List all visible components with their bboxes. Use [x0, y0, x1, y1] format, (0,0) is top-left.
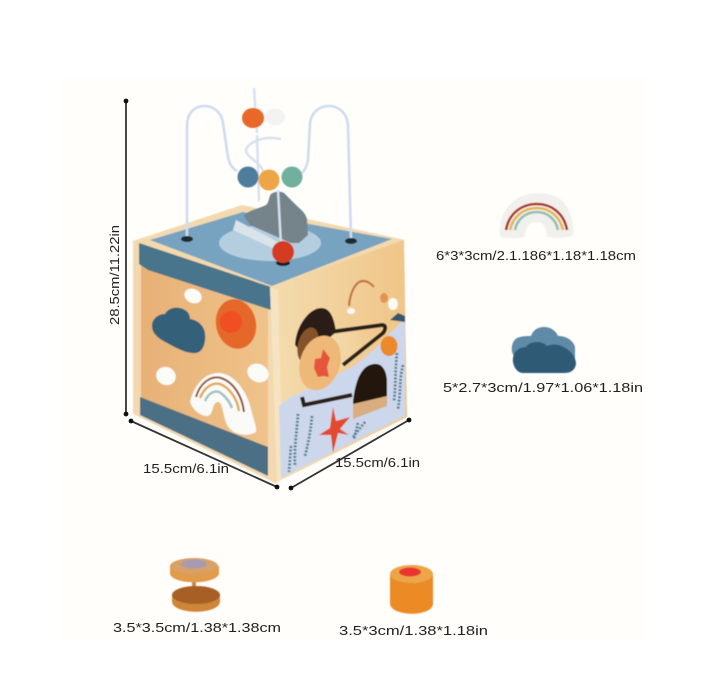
icon: cloud piece [512, 327, 576, 373]
label: right width: 15.5cm/6.1in [335, 455, 420, 470]
wire posts [181, 236, 193, 242]
lower arched hole [353, 364, 387, 418]
wooden bead with crab [292, 325, 348, 396]
bead wire frame [187, 106, 351, 238]
birds [380, 293, 398, 310]
cube wooden top frame [133, 205, 405, 290]
spiral wire [246, 88, 281, 245]
dimension arrow: left width [129, 419, 279, 489]
black groove [302, 325, 385, 405]
cloud cutout [152, 308, 205, 353]
sun shape block [211, 295, 261, 353]
dimension arrow: right width [289, 418, 411, 490]
whale block [244, 192, 308, 243]
icon: sun cylinder piece [390, 565, 433, 614]
sea illustration [279, 318, 405, 478]
icon: rainbow piece [500, 193, 573, 238]
background panel [60, 78, 647, 640]
label: height: 28.5cm/11.22in [107, 225, 122, 325]
red knob [276, 260, 290, 266]
small clouds [153, 286, 272, 388]
starfish [319, 407, 350, 453]
dimension arrow: height [124, 99, 128, 416]
dial disc [219, 225, 321, 261]
label: rainbow size: 6*3*3cm/2.1.186*1.18*1.18cm [436, 248, 636, 263]
label: sun cylinder size: 3.5*3cm/1.38*1.18in [339, 623, 488, 638]
upper hole [295, 308, 336, 358]
rainbow block [190, 373, 256, 435]
label: cloud size: 5*2.7*3cm/1.97*1.06*1.18in [443, 380, 643, 395]
beads on wire [238, 108, 302, 190]
label: crab bead size: 3.5*3.5cm/1.38*1.38cm [113, 620, 281, 635]
toy cube [133, 88, 407, 484]
wooden slot area [330, 325, 383, 372]
panel: left face [133, 240, 277, 484]
panel: right face [270, 240, 407, 482]
dark hill [390, 313, 405, 322]
fish [380, 336, 398, 356]
blue top panel [150, 212, 392, 286]
rainbow print [349, 281, 374, 306]
left face bottom blue strip [140, 397, 268, 476]
icon: crab bead piece [170, 558, 220, 612]
label: left width: 15.5cm/6.1in [143, 461, 229, 476]
left face top blue strip [139, 243, 271, 310]
seaweed [289, 353, 403, 472]
